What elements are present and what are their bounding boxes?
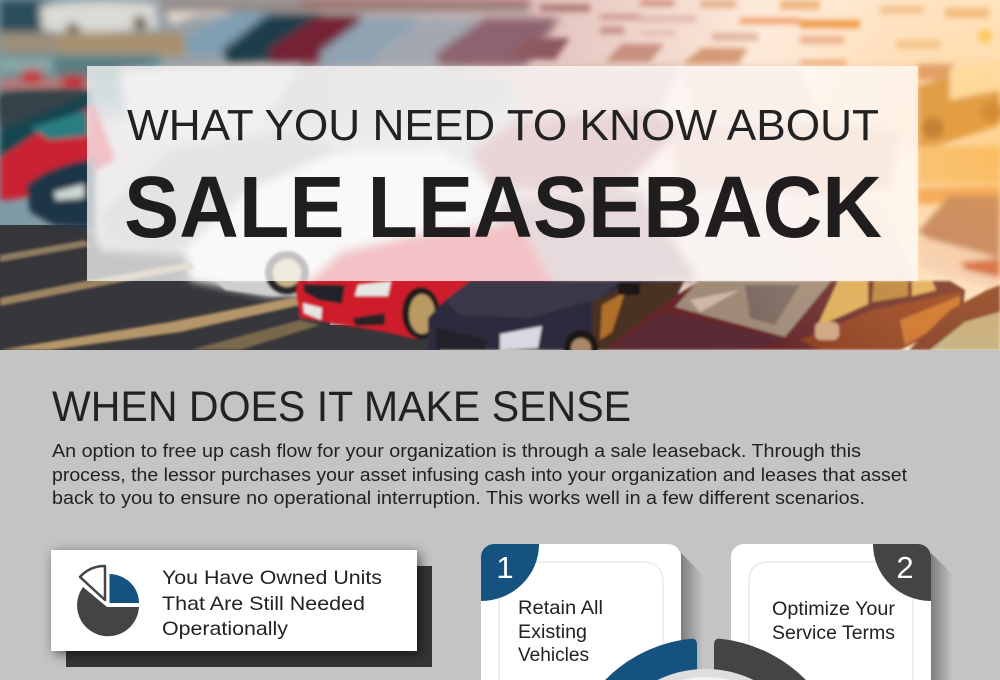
donut chart xyxy=(605,639,806,680)
segment: blue xyxy=(605,639,697,680)
intro paragraph: process, the lessor purchases your asset infusing cash into your organization and leases that asset xyxy=(52,465,907,485)
hero photo: car lot xyxy=(0,0,1000,366)
intro paragraph: back to you to ensure no operational interruption. This works well in a few different scenarios. xyxy=(52,488,865,508)
badge 1: 1 xyxy=(496,550,514,585)
back row cars xyxy=(184,12,282,56)
ground stripes xyxy=(0,296,305,350)
red foreground car xyxy=(296,281,500,339)
sunlit rows, right side xyxy=(510,38,570,60)
box text: That Are Still Needed xyxy=(162,593,365,615)
intro paragraph xyxy=(52,441,907,508)
card 1 text: Existing xyxy=(518,622,587,643)
card 2: service terms xyxy=(731,544,953,680)
white car front xyxy=(215,281,298,296)
sun glare xyxy=(778,0,1000,350)
card 1: retain vehicles xyxy=(481,544,703,680)
icon: pie chart xyxy=(77,566,139,636)
badge 2 xyxy=(873,544,931,601)
box text: Operationally xyxy=(162,618,288,640)
right cars xyxy=(916,76,1000,150)
far left cars xyxy=(0,0,50,32)
card 2 text: Service Terms xyxy=(772,623,895,644)
title line 2: SALE LEASEBACK xyxy=(124,159,882,256)
title line 1: WHAT YOU NEED TO KNOW ABOUT xyxy=(127,101,879,150)
box text xyxy=(162,567,382,640)
scenario box: owned units xyxy=(51,550,432,667)
card 1 text: Retain All xyxy=(518,598,603,619)
card 2 text xyxy=(772,599,896,644)
far right car xyxy=(909,285,1000,350)
dark maroon car xyxy=(428,281,684,350)
segment: dark xyxy=(714,639,806,680)
box text: You Have Owned Units xyxy=(162,567,382,589)
card 2 text: Optimize Your xyxy=(772,599,896,620)
badge 1 xyxy=(481,544,539,601)
left cars xyxy=(0,92,90,165)
card 1 text xyxy=(518,598,603,666)
intro paragraph: An option to free up cash flow for your organization is through a sale leaseback. Through this xyxy=(52,441,861,461)
card 1 text: Vehicles xyxy=(518,645,589,666)
big sunlit car xyxy=(604,281,965,350)
title panel xyxy=(87,66,918,281)
badge 2: 2 xyxy=(896,550,914,585)
mid cars under panel xyxy=(91,120,198,258)
section heading: WHEN DOES IT MAKE SENSE xyxy=(52,383,631,431)
